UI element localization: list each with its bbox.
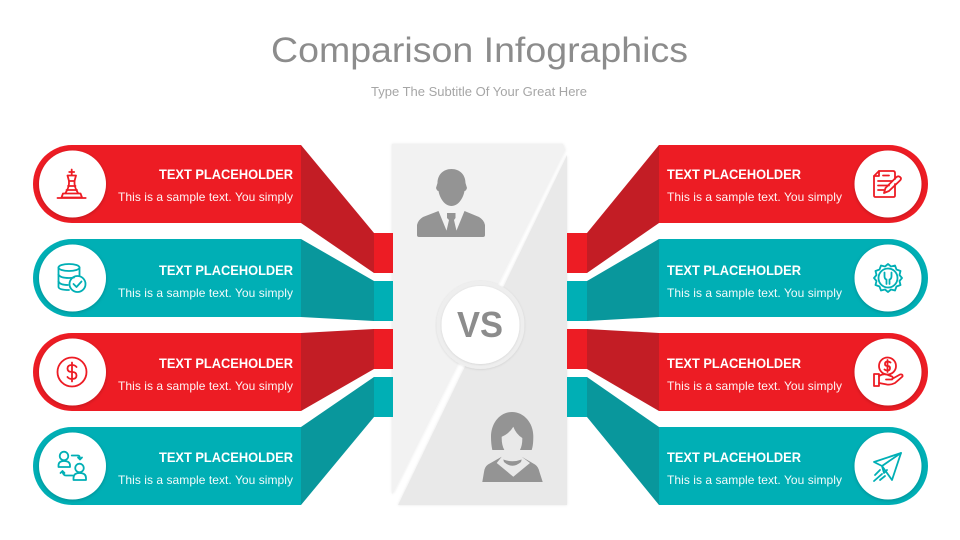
circle xyxy=(854,244,922,312)
left item 2 xyxy=(33,239,393,321)
icon: database check xyxy=(58,264,86,292)
heading: TEXT PLACEHOLDER xyxy=(667,355,801,371)
right item 3 xyxy=(567,329,928,411)
band xyxy=(659,427,928,505)
upper light panel xyxy=(392,144,566,494)
panel: center versus card xyxy=(392,144,567,505)
circle xyxy=(854,150,922,218)
connector xyxy=(301,329,393,411)
connector xyxy=(567,377,659,505)
circle xyxy=(39,432,106,500)
lower darker panel xyxy=(398,155,567,505)
band xyxy=(33,145,301,223)
heading: TEXT PLACEHOLDER xyxy=(667,449,801,465)
heading: TEXT PLACEHOLDER xyxy=(159,449,293,465)
connector xyxy=(301,145,393,273)
right item 4 xyxy=(567,377,928,505)
connector xyxy=(301,239,393,321)
heading: TEXT PLACEHOLDER xyxy=(667,166,801,182)
right item 2 xyxy=(567,239,928,321)
icon: gear and wrench xyxy=(874,264,902,292)
connector xyxy=(567,239,659,321)
body text: This is a sample text. You simply xyxy=(118,473,293,487)
heading: TEXT PLACEHOLDER xyxy=(159,355,293,371)
band xyxy=(33,333,301,411)
circle xyxy=(854,338,922,406)
connector xyxy=(567,329,659,411)
icon: paper plane xyxy=(874,453,901,481)
icon: document and pen xyxy=(874,171,901,197)
body text: This is a sample text. You simply xyxy=(667,473,842,487)
VS badge xyxy=(436,281,524,369)
subtitle: Type The Subtitle Of Your Great Here xyxy=(371,84,587,99)
heading: TEXT PLACEHOLDER xyxy=(159,166,293,182)
icon: dollar xyxy=(58,358,86,386)
circle xyxy=(39,244,106,312)
icon: businessman xyxy=(417,169,485,237)
left item 4 xyxy=(33,377,393,505)
icon: people exchange xyxy=(58,452,86,480)
heading: TEXT PLACEHOLDER xyxy=(667,262,801,278)
band xyxy=(659,239,928,317)
circle xyxy=(39,338,106,406)
body text: This is a sample text. You simply xyxy=(118,190,293,204)
left item 3 xyxy=(33,329,393,411)
body text: This is a sample text. You simply xyxy=(118,379,293,393)
VS badge: VS xyxy=(457,304,503,345)
left item 1 xyxy=(33,145,393,273)
band xyxy=(659,145,928,223)
title: Comparison Infographics xyxy=(271,30,688,70)
circle xyxy=(854,432,922,500)
connector xyxy=(567,145,659,273)
heading: TEXT PLACEHOLDER xyxy=(159,262,293,278)
icon: chess king xyxy=(58,170,86,198)
band xyxy=(659,333,928,411)
body text: This is a sample text. You simply xyxy=(118,286,293,300)
band xyxy=(33,427,301,505)
icon: businesswoman xyxy=(482,412,543,482)
body text: This is a sample text. You simply xyxy=(667,379,842,393)
body text: This is a sample text. You simply xyxy=(667,190,842,204)
connector xyxy=(301,377,393,505)
icon: hand holding coin xyxy=(874,358,903,386)
body text: This is a sample text. You simply xyxy=(667,286,842,300)
band xyxy=(33,239,301,317)
circle xyxy=(39,150,106,218)
right item 1 xyxy=(567,145,928,273)
